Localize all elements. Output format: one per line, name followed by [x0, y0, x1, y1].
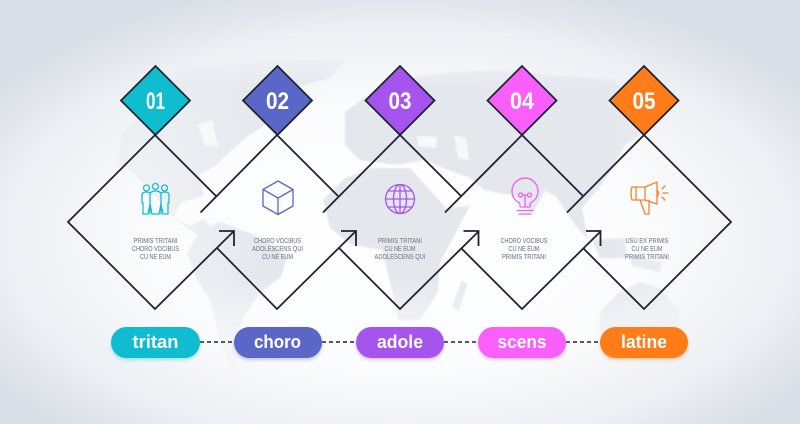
pill: choro: choro	[254, 332, 301, 352]
caption 3: CU NE EUM	[384, 246, 416, 253]
large diamond outline 3	[323, 135, 479, 309]
australia	[600, 282, 670, 335]
world map	[132, 69, 670, 335]
arrow head 2	[341, 231, 356, 246]
caption 1: PRIMIS TRITANI	[134, 238, 178, 245]
step 4	[445, 66, 601, 309]
number diamond 2	[243, 66, 312, 135]
number diamond 5: 05	[632, 88, 656, 115]
caption 1: CHORO VOCIBUS	[132, 246, 179, 253]
step 5	[567, 66, 731, 309]
indonesia	[592, 238, 662, 272]
step 2	[200, 66, 356, 309]
pill: scens	[478, 327, 566, 360]
arrow head 1	[219, 231, 234, 246]
caption 2: ADOLESCENS QUI	[252, 246, 303, 253]
pill: scens: scens	[498, 332, 546, 352]
caption 5: USU EX PRIMIS	[626, 238, 669, 245]
inland water	[198, 108, 469, 160]
number diamond 1	[121, 66, 190, 135]
icon: megaphone	[631, 182, 668, 214]
caption 4: PRIMIS TRITANI	[502, 254, 546, 261]
icon: cube	[263, 181, 293, 214]
step 1	[68, 66, 234, 309]
pill: adole	[356, 327, 444, 360]
caption 2	[252, 238, 303, 261]
caption 4	[500, 238, 548, 261]
caption 3	[374, 238, 426, 261]
caption 5	[625, 238, 669, 261]
caption 5: CU NE EUM	[632, 246, 663, 253]
icon: people	[142, 184, 169, 214]
caption 4: CHORO VOCIBUS	[500, 238, 548, 245]
large diamond outline 2	[200, 135, 356, 309]
step 3	[323, 66, 479, 309]
dashed connector	[200, 341, 600, 343]
number diamond 4	[488, 66, 556, 135]
number diamond 3	[366, 66, 434, 135]
caption 2: CU NE EUM	[262, 254, 293, 261]
arrow head 3	[464, 231, 478, 246]
pill: latine	[600, 327, 688, 360]
africa	[323, 168, 470, 320]
icon: globe	[386, 184, 414, 214]
pill: choro	[234, 327, 322, 360]
south america	[188, 222, 287, 335]
caption 1	[132, 238, 179, 261]
large diamond outline 4	[445, 135, 601, 309]
caption 1: CU NE EUM	[140, 254, 171, 261]
caption 3: ADOLESCENS QUI	[374, 254, 426, 261]
arrow head 4	[586, 231, 600, 246]
madagascar	[452, 280, 467, 311]
number diamond 2: 02	[266, 88, 289, 115]
caption 4: CU NE EUM	[508, 246, 540, 253]
pill: tritan: tritan	[132, 332, 178, 352]
caption 5: PRIMIS TRITANI	[625, 254, 669, 261]
pill: latine: latine	[621, 332, 667, 352]
large diamond outline 1	[68, 135, 234, 309]
eurasia	[345, 70, 643, 240]
large diamond outline 5	[567, 135, 731, 309]
pill: adole: adole	[377, 332, 423, 352]
number diamond 3: 03	[388, 88, 412, 115]
caption 2: CHORO VOCIBUS	[254, 238, 301, 245]
number diamond 5	[610, 66, 678, 135]
pill: tritan	[111, 327, 200, 360]
caption 3: PRIMIS TRITANI	[378, 238, 422, 245]
number diamond 1: 01	[146, 88, 165, 115]
number diamond 4: 04	[510, 88, 535, 115]
icon: light bulb	[512, 178, 538, 214]
north america	[132, 69, 336, 234]
